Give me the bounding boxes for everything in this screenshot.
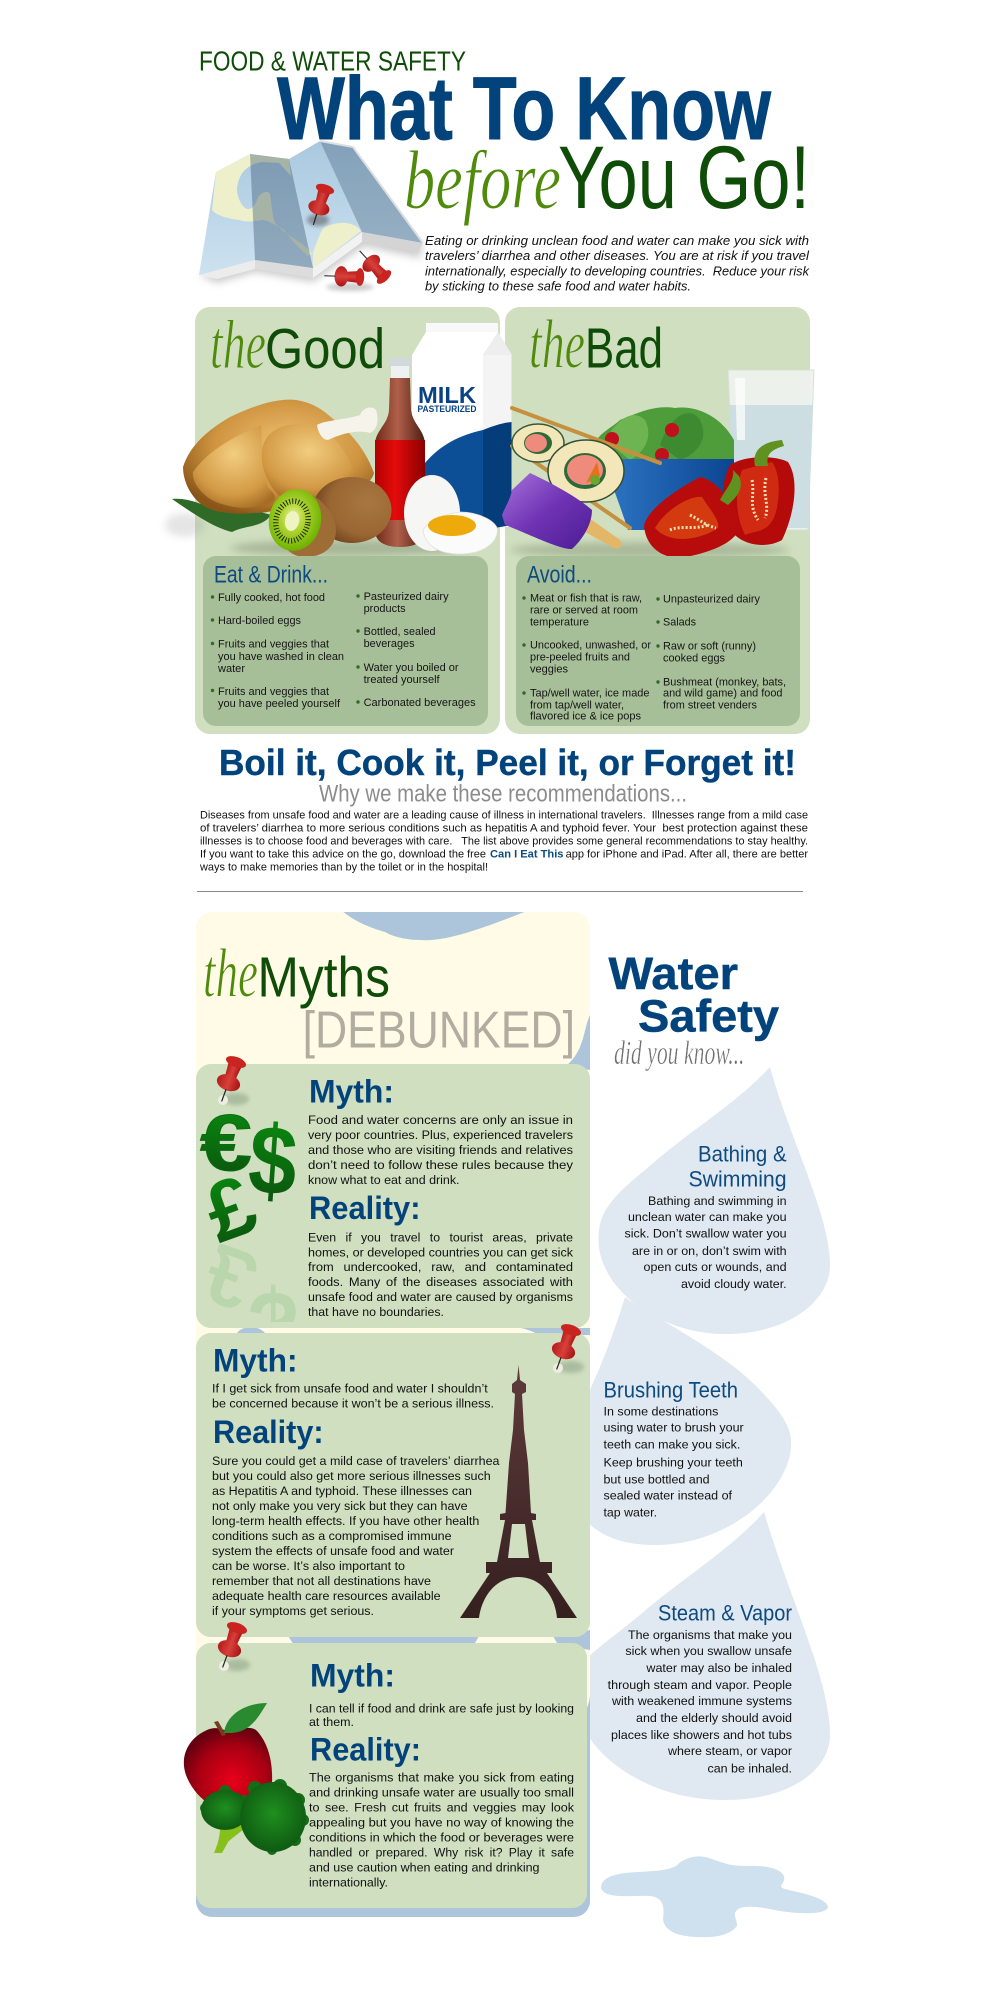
- list: eat and drink: Hard-boiled eggs: [218, 615, 301, 627]
- text: reality 2: conditions such as a compromised immune: [212, 1529, 452, 1543]
- title: kicker: FOOD & WATER SAFETY: [199, 46, 466, 77]
- text: steam and vapor: water may also be inhaled: [645, 1661, 792, 1675]
- heading: debunked: [DEBUNKED]: [303, 1002, 575, 1060]
- icon: bottle: [375, 358, 425, 547]
- text: reality 3: and drinking unsafe water are usually too small: [309, 1786, 574, 1800]
- list: avoid: Uncooked, unwashed, or: [530, 640, 651, 652]
- heading: the bad: the: [529, 307, 585, 384]
- text: myth 2: be concerned because it won’t be a serious illness.: [212, 1397, 494, 1411]
- text: myth 1: Food and water concerns are only an issue in: [308, 1113, 573, 1127]
- intro text: [425, 233, 810, 294]
- list: avoid: Unpasteurized dairy: [663, 594, 760, 606]
- panel: eat and drink: [203, 556, 488, 726]
- text: steam and vapor: The organisms that make you: [628, 1628, 792, 1642]
- text: steam and vapor: with weakened immune systems: [611, 1694, 792, 1708]
- icon: currency symbols: £: [193, 1226, 268, 1330]
- icon: currency symbols: $: [245, 1104, 301, 1217]
- text: reality 3: [309, 1771, 575, 1890]
- text: brushing teeth: sealed water instead of: [604, 1488, 733, 1502]
- title: you go: You Go!: [558, 127, 810, 227]
- text: recommendations paragraph: app for iPhone and iPad. After all, there are better: [566, 849, 808, 861]
- list: eat and drink: Pasteurized dairy: [364, 591, 449, 603]
- text: brushing teeth: using water to brush your: [604, 1421, 744, 1435]
- icon: leaf: [172, 499, 271, 532]
- text: myth 1: and those who are visiting friends and relatives: [308, 1143, 573, 1157]
- text: reality 1: [308, 1230, 574, 1319]
- text: reality 3: appealing but you have no way of knowing the: [309, 1816, 574, 1830]
- list: avoid: rare or served at room: [530, 605, 638, 617]
- list: eat and drink: beverages: [364, 638, 415, 650]
- text: bathing and swimming: Bathing &: [698, 1142, 787, 1167]
- text: myth 1: don’t need to follow these rules because they: [308, 1158, 574, 1172]
- heading: the good: [210, 307, 385, 384]
- text: bathing and swimming: are in or on, don’t swim with: [632, 1244, 787, 1258]
- heading: water safety: Safety: [638, 991, 780, 1042]
- icon: apple: [184, 1703, 272, 1815]
- text: myth 1: very poor countries. Plus, experienced travelers: [308, 1128, 573, 1142]
- text: reality 2: not only make you very sick but they can have: [212, 1499, 468, 1513]
- text: reality 2: long-term health effects. If you have other health: [212, 1514, 479, 1528]
- panel: myths background: [196, 905, 590, 1917]
- list: eat and drink: Fully cooked, hot food: [218, 592, 325, 604]
- text: bathing and swimming: sick. Don’t swallow water you: [624, 1227, 787, 1241]
- icon: milk carton: PASTEURIZED: [418, 404, 477, 415]
- title: what to know: What To Know: [277, 58, 772, 158]
- text: reality 2: but you could also get more serious illnesses such: [212, 1469, 491, 1483]
- icon: chopsticks: [512, 408, 660, 528]
- text: reality 3: internationally.: [309, 1876, 388, 1890]
- icon: currency symbols: €: [200, 1098, 252, 1187]
- list: avoid: temperature: [530, 617, 589, 629]
- list: avoid: veggies: [530, 664, 568, 676]
- text: brushing teeth: Keep brushing your teeth: [604, 1456, 743, 1470]
- text: reality 3: and use caution when eating and drinking: [309, 1861, 540, 1875]
- text: reality 2: system the effects of unsafe food and water: [212, 1544, 454, 1558]
- heading: the myths: Myths: [258, 946, 390, 1010]
- drop: steam background: [585, 1512, 830, 1800]
- text: steam and vapor: can be inhaled.: [708, 1762, 792, 1776]
- heading: the bad: Bad: [585, 317, 663, 381]
- drop: bathing background: [598, 1067, 830, 1334]
- list: avoid: from tap/well water,: [530, 700, 624, 712]
- icon: red peppers: [644, 440, 795, 558]
- panel: myth card 2: [196, 1333, 590, 1637]
- list: eat and drink: Fruits and veggies that: [218, 686, 329, 698]
- intro text: by sticking to these safe food and water habits.: [425, 279, 691, 294]
- text: myth 1: [308, 1113, 574, 1187]
- icon: eggs: [404, 475, 498, 554]
- text: brushing teeth: teeth can make you sick.: [604, 1437, 740, 1451]
- illustration: good foods: [165, 323, 512, 557]
- text: recommendations paragraph: If you want to take this advice on the go, download the free: [200, 849, 486, 861]
- text: brushing teeth: tap water.: [604, 1506, 657, 1520]
- icon: pin card 1: [210, 1053, 249, 1106]
- text: steam and vapor: places like showers and hot tubs: [611, 1728, 792, 1742]
- text: brushing teeth: [604, 1377, 744, 1520]
- heading: water safety: [608, 948, 780, 1042]
- text: reality 2: as Hepatitis A and typhoid. These illnesses can: [212, 1484, 472, 1498]
- text: steam and vapor: where steam, or vapor: [667, 1744, 792, 1758]
- list: avoid: Bushmeat (monkey, bats,: [663, 677, 786, 689]
- list: eat and drink: [211, 591, 476, 710]
- heading: myth: Myth:: [309, 1073, 394, 1109]
- text: bathing and swimming: avoid cloudy water.: [681, 1277, 787, 1291]
- text: bathing and swimming: Bathing and swimming in: [648, 1194, 787, 1208]
- list: avoid: and wild game) and food: [663, 688, 782, 700]
- heading: eat and drink: Eat & Drink...: [214, 562, 328, 589]
- text: recommendations paragraph: Can I Eat This: [490, 849, 564, 861]
- text: reality 2: can be worse. It’s also important to: [212, 1559, 405, 1573]
- icon: sushi: [512, 424, 624, 502]
- icon: ice pop: [502, 473, 622, 549]
- list: avoid: Meat or fish that is raw,: [530, 593, 642, 605]
- heading: the myths: the: [203, 936, 258, 1013]
- text: steam and vapor: Steam & Vapor: [658, 1601, 792, 1626]
- text: recommendations paragraph: [199, 810, 808, 874]
- text: reality 2: if your symptoms get serious.: [212, 1604, 374, 1618]
- text: reality 3: The organisms that make you sick from eating: [309, 1771, 574, 1785]
- icon: broccoli: [200, 1779, 309, 1855]
- text: steam and vapor: through steam and vapor. People: [608, 1678, 792, 1692]
- icon: milk carton: MILK: [418, 382, 476, 408]
- list: avoid: from street venders: [663, 700, 757, 712]
- heading: water safety: Water: [608, 948, 738, 999]
- icon: roast chicken: [183, 400, 378, 514]
- list: avoid: flavored ice & ice pops: [530, 711, 642, 723]
- heading: the myths: [203, 936, 390, 1013]
- list: eat and drink: treated yourself: [364, 674, 441, 686]
- icon: pin on map: [303, 181, 337, 228]
- list: eat and drink: water: [217, 663, 245, 675]
- text: steam and vapor: [608, 1601, 792, 1776]
- icon: eiffel tower: [460, 1365, 577, 1618]
- icon: pins below map: [324, 244, 394, 291]
- drop: brushing background: [585, 1297, 791, 1545]
- text: reality 1: from undercooked, raw, and contaminated: [308, 1260, 573, 1274]
- icon: folded map: [199, 141, 423, 283]
- text: myth 3: I can tell if food and drink are safe just by looking: [309, 1702, 574, 1716]
- text: myth 1: know what to eat and drink.: [308, 1173, 460, 1187]
- intro text: travelers’ diarrhea and other diseases. You are at risk if you travel: [425, 248, 810, 263]
- heading: the bad: [529, 307, 663, 384]
- subheading: did you know: did you know...: [614, 1035, 744, 1072]
- text: reality 1: that have no boundaries.: [308, 1305, 444, 1319]
- panel: the bad: [505, 307, 810, 734]
- list: eat and drink: you have peeled yourself: [218, 698, 341, 710]
- icon: puddle: [601, 1856, 828, 1937]
- heading: myth: Myth:: [213, 1343, 298, 1379]
- text: reality 1: unsafe food and water are caused by organisms: [308, 1290, 573, 1304]
- icon: pin card 2: [545, 1321, 584, 1374]
- text: myth 3: [309, 1702, 574, 1729]
- list: eat and drink: Fruits and veggies that: [218, 639, 329, 651]
- title: before: before: [404, 134, 561, 227]
- icon: currency symbols: [200, 1114, 296, 1322]
- heading: reality: Reality:: [310, 1732, 421, 1768]
- text: reality 3: conditions in which the food or beverages were: [309, 1831, 574, 1845]
- heading: the good: Good: [265, 317, 385, 381]
- text: bathing and swimming: open cuts or wounds, and: [644, 1260, 787, 1274]
- text: brushing teeth: but use bottled and: [604, 1472, 710, 1486]
- panel: myth card 3: [184, 1643, 587, 1908]
- intro text: internationally, especially to developing countries. Reduce your risk: [425, 264, 810, 279]
- heading: avoid: Avoid...: [527, 562, 592, 589]
- intro text: Eating or drinking unclean food and water can make you sick with: [425, 233, 809, 248]
- text: steam and vapor: sick when you swallow unsafe: [625, 1644, 792, 1658]
- text: steam and vapor: and the elderly should avoid: [636, 1711, 792, 1725]
- list: avoid: Salads: [663, 617, 696, 629]
- list: avoid: cooked eggs: [663, 653, 725, 665]
- list: eat and drink: Water you boiled or: [364, 662, 459, 674]
- icon: salad: [592, 407, 734, 530]
- text: bathing and swimming: unclean water can make you: [628, 1210, 787, 1224]
- list: eat and drink: you have washed in clean: [218, 651, 344, 663]
- list: eat and drink: products: [364, 603, 406, 615]
- text: reality 2: adequate health care resources available: [212, 1589, 441, 1603]
- text: recommendations paragraph: illnesses is to choose food and beverages with care. The list above provides some general recommendations to stay healthy.: [200, 836, 808, 848]
- subheading: why: Why we make these recommendations...: [319, 781, 687, 808]
- text: myth 2: [212, 1382, 494, 1411]
- text: reality 1: foods. Many of the diseases associated with: [308, 1275, 573, 1289]
- text: bathing and swimming: [624, 1142, 787, 1291]
- list: eat and drink: Bottled, sealed: [364, 626, 436, 638]
- icon: currency symbols: £: [193, 1156, 268, 1260]
- text: brushing teeth: In some destinations: [604, 1405, 718, 1419]
- text: reality 3: to see. Fresh cut fruits and veggies may look: [309, 1801, 575, 1815]
- list: avoid: [522, 593, 786, 723]
- icon: currency symbols: $: [249, 1271, 297, 1381]
- text: bathing and swimming: Swimming: [688, 1167, 787, 1192]
- panel: avoid: [516, 556, 800, 726]
- heading: reality: Reality:: [309, 1190, 420, 1226]
- text: reality 2: [212, 1454, 500, 1618]
- heading: boil it: Boil it, Cook it, Peel it, or Forget it!: [219, 742, 796, 783]
- text: myth 3: at them.: [309, 1715, 354, 1729]
- icon: pin card 3: [211, 1619, 250, 1672]
- text: myth 2: If I get sick from unsafe food and water I shouldn’t: [212, 1382, 488, 1396]
- text: brushing teeth: Brushing Teeth: [604, 1377, 738, 1402]
- text: reality 1: homes, or developed countries you can get sick: [308, 1245, 574, 1259]
- text: recommendations paragraph: Diseases from unsafe food and water are a leading cause of illness in international travelers. Illnesses range from a mild case: [200, 810, 808, 822]
- icon: milk carton: [412, 323, 512, 530]
- icon: glass of water: [728, 370, 814, 530]
- text: reality 2: Sure you could get a mild case of travelers’ diarrhea: [212, 1454, 500, 1468]
- text: reality 3: handled or prepared. Why risk it? Play it safe: [309, 1846, 574, 1860]
- icon: kiwi: [263, 477, 392, 557]
- heading: reality: Reality:: [213, 1414, 324, 1450]
- list: avoid: pre-peeled fruits and: [530, 652, 630, 664]
- text: recommendations paragraph: of travelers’ diarrhea to more serious conditions such as hepatitis A and typhoid fever. Your best protection against these: [200, 823, 808, 835]
- list: avoid: Tap/well water, ice made: [530, 688, 650, 700]
- text: recommendations paragraph: ways to make memories than by the toilet or in the hospital!: [199, 862, 488, 874]
- panel: the good: [195, 307, 500, 734]
- icon: bone: [317, 408, 378, 440]
- illustration: bad foods: [502, 370, 814, 558]
- panel: myth card 1: [196, 1064, 590, 1328]
- heading: myth: Myth:: [310, 1658, 395, 1694]
- list: avoid: Raw or soft (runny): [663, 641, 756, 653]
- heading: the good: the: [210, 307, 266, 384]
- text: reality 1: Even if you travel to tourist areas, private: [308, 1230, 573, 1244]
- text: reality 2: remember that not all destinations have: [212, 1574, 431, 1588]
- list: eat and drink: Carbonated beverages: [364, 697, 476, 709]
